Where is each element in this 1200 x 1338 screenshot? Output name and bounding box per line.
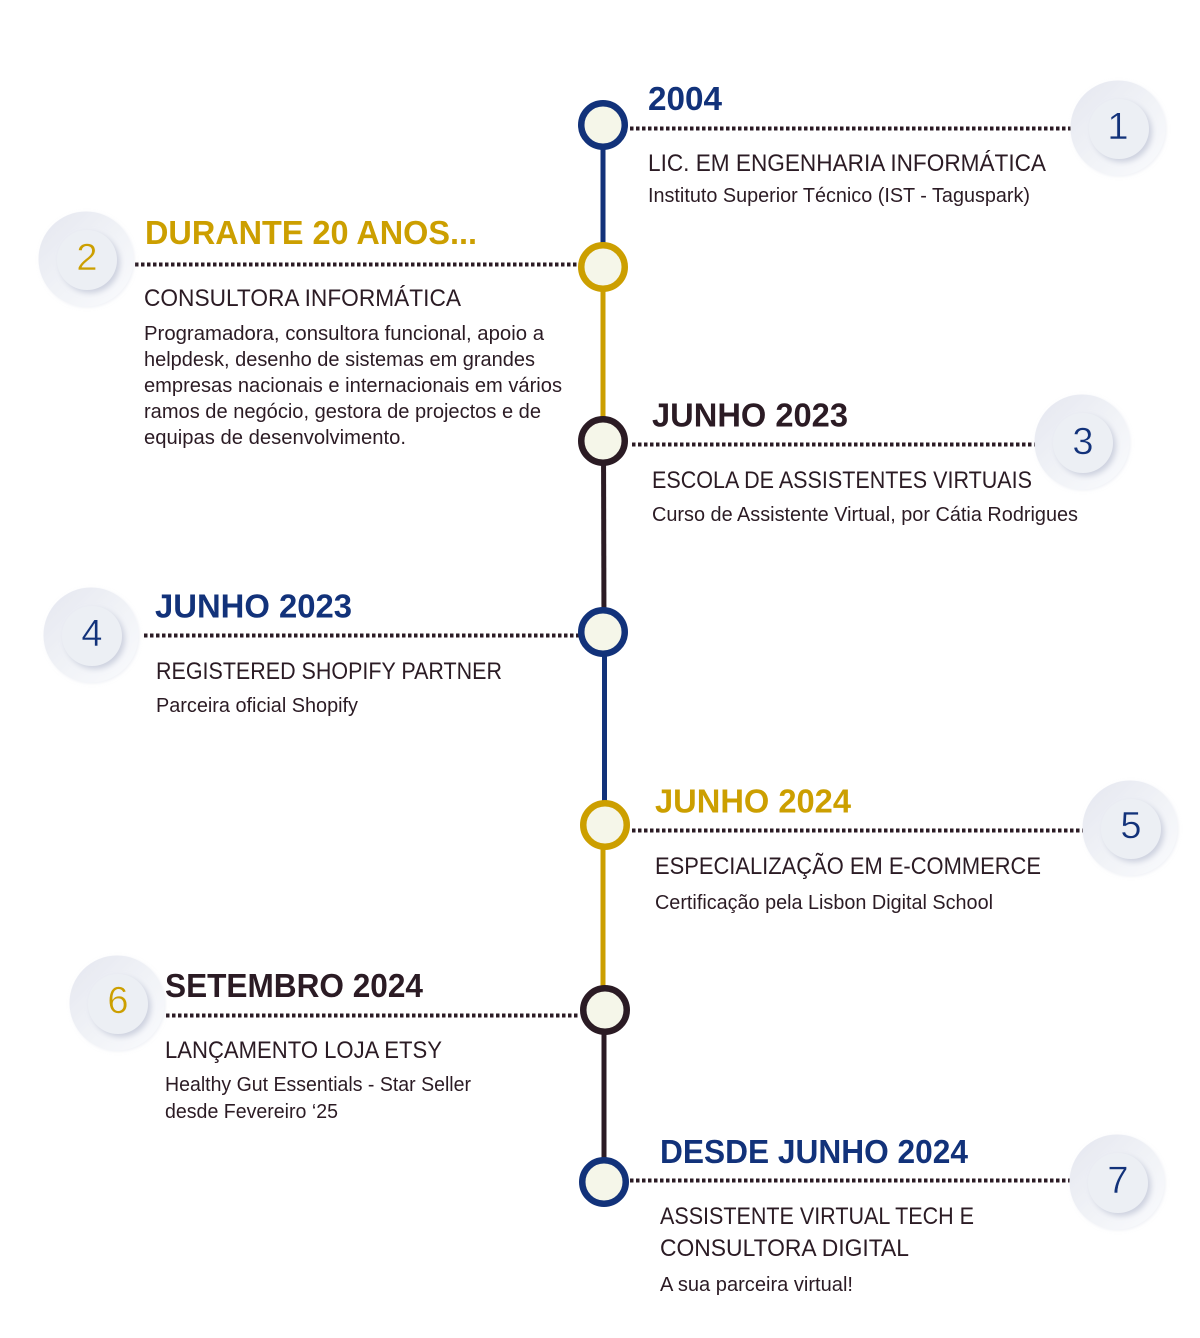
badge 4: 4 <box>81 613 103 655</box>
badge 6 <box>70 956 164 1050</box>
badge 1 <box>1070 80 1166 176</box>
entry 7 text: DESDE JUNHO 2024 <box>660 1133 969 1170</box>
badge 1: 1 <box>1107 106 1129 148</box>
entry 6 text: Healthy Gut Essentials - Star Seller <box>165 1074 471 1096</box>
entry 5 text: JUNHO 2024 <box>655 782 852 820</box>
entry 1 text <box>648 80 1046 207</box>
node: 7 <box>582 1160 626 1204</box>
entry 2 text: CONSULTORA INFORMÁTICA <box>144 285 461 312</box>
entry 2 text: helpdesk, desenho de sistemas em grandes <box>144 349 535 371</box>
entry 2 text: DURANTE 20 ANOS... <box>145 214 477 251</box>
node: 6 <box>583 988 627 1032</box>
entry 2 text: equipas de desenvolvimento. <box>144 427 406 449</box>
badge 2 <box>38 212 134 306</box>
entry 4 text: REGISTERED SHOPIFY PARTNER <box>156 658 502 685</box>
entry 4 text: Parceira oficial Shopify <box>156 695 358 717</box>
entry 5 text <box>655 782 1041 914</box>
entry 4 text <box>155 588 502 717</box>
entry 2 text: empresas nacionais e internacionais em vários <box>144 375 562 397</box>
timeline spine <box>603 125 604 1182</box>
entry 1 text: 2004 <box>648 80 723 117</box>
badge 3 <box>1034 394 1130 490</box>
entry 3 text: ESCOLA DE ASSISTENTES VIRTUAIS <box>652 467 1032 494</box>
dotted connectors <box>135 128 1084 1180</box>
entry 7 text <box>660 1133 974 1296</box>
entry 6 text: desde Fevereiro ‘25 <box>165 1101 338 1123</box>
entry 2 text: ramos de negócio, gestora de projectos e de <box>144 401 541 423</box>
node: 5 <box>583 803 627 847</box>
entry 5 text: ESPECIALIZAÇÃO EM E-COMMERCE <box>655 853 1041 880</box>
entry 2 text <box>144 214 562 449</box>
badge 7: 7 <box>1107 1160 1129 1202</box>
entry 1 text: LIC. EM ENGENHARIA INFORMÁTICA <box>648 150 1046 177</box>
node: 3 <box>581 419 625 463</box>
entry 3 text: Curso de Assistente Virtual, por Cátia Rodrigues <box>652 504 1078 526</box>
entry 7 text: CONSULTORA DIGITAL <box>660 1235 909 1262</box>
badge 7 <box>1070 1134 1164 1230</box>
entry 4 text: JUNHO 2023 <box>155 588 352 624</box>
entry 6 text: LANÇAMENTO LOJA ETSY <box>165 1037 442 1064</box>
node: 4 <box>581 610 625 654</box>
badge 5: 5 <box>1120 805 1142 847</box>
entry 3 text <box>652 396 1078 526</box>
entry 3 text: JUNHO 2023 <box>652 396 848 434</box>
entry 2 text: Programadora, consultora funcional, apoio a <box>144 323 545 345</box>
badge 5 <box>1082 780 1178 876</box>
badge 2: 2 <box>76 237 98 279</box>
entry 5 text: Certificação pela Lisbon Digital School <box>655 892 993 914</box>
entry 6 text <box>165 967 471 1123</box>
entry 7 text: A sua parceira virtual! <box>660 1274 853 1296</box>
entry 1 text: Instituto Superior Técnico (IST - Taguspark) <box>648 185 1030 207</box>
node: 2 <box>581 245 625 289</box>
badge 4 <box>44 588 138 682</box>
entry 7 text: ASSISTENTE VIRTUAL TECH E <box>660 1203 974 1230</box>
badge 6: 6 <box>107 980 129 1022</box>
badge 3: 3 <box>1072 421 1094 463</box>
node: 1 <box>581 103 625 147</box>
entry 6 text: SETEMBRO 2024 <box>165 967 424 1004</box>
